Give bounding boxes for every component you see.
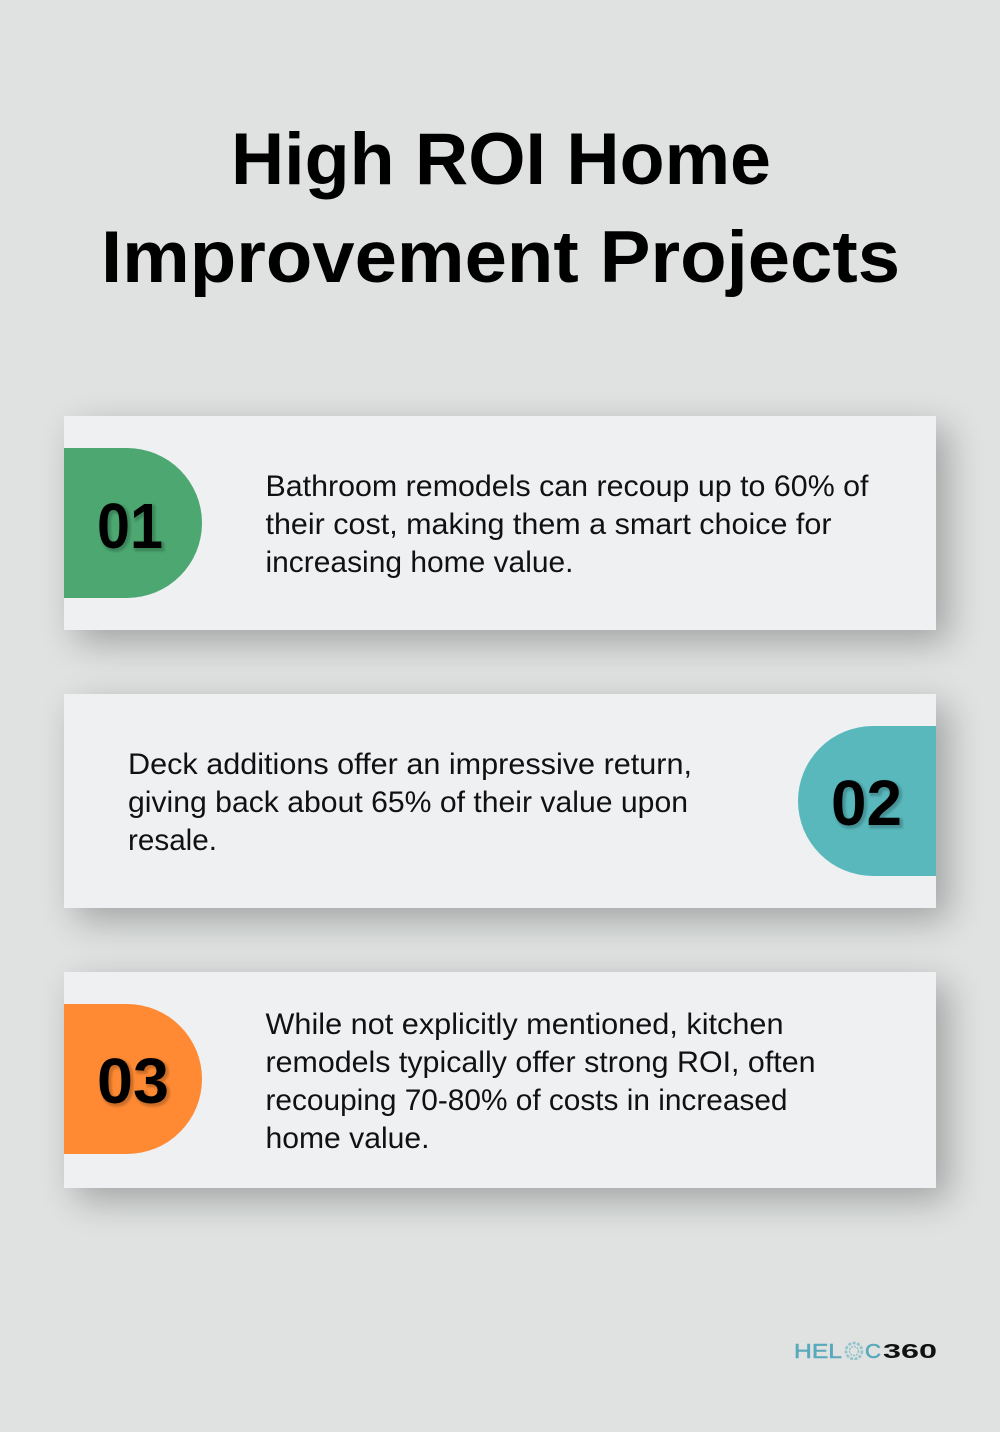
text: step 03 description: While not explicitly mentioned, kitchen	[266, 1008, 784, 1041]
logo: HELOC360: C	[865, 1341, 881, 1363]
panel: step 02	[64, 694, 948, 920]
text: step 02 description: resale.	[128, 824, 217, 857]
title	[101, 119, 900, 298]
text: step 01 description: Bathroom remodels can recoup up to 60% of	[266, 470, 869, 503]
badge: 03: 03	[97, 1045, 169, 1117]
text: step 03 description: recouping 70-80% of costs in increased	[266, 1084, 788, 1117]
text: step 01 description: increasing home value.	[266, 546, 574, 579]
text: step 02 description: giving back about 65% of their value upon	[128, 786, 688, 819]
panel: step 03	[64, 972, 948, 1200]
logo: HELOC360: HEL	[794, 1341, 842, 1363]
text: step 02 description	[128, 748, 692, 857]
text: step 03 description	[266, 1008, 816, 1155]
badge: 03	[64, 1004, 202, 1154]
text: step 03 description: remodels typically offer strong ROI, often	[266, 1046, 816, 1079]
logo: HELOC360: 360	[883, 1341, 937, 1363]
badge: 01: 01	[99, 492, 165, 564]
badge: 01: 01	[97, 490, 163, 562]
badge: 02	[798, 726, 936, 876]
badge: 02: 02	[833, 769, 904, 841]
badge: 01	[64, 448, 202, 598]
badge: 03: 03	[99, 1047, 171, 1119]
text: step 01 description	[266, 470, 869, 579]
text: step 03 description: home value.	[266, 1122, 430, 1155]
badge: 02: 02	[831, 767, 902, 839]
panel: step 01	[64, 416, 948, 642]
text: step 02 description: Deck additions offer an impressive return,	[128, 748, 692, 781]
title: High ROI Home	[231, 119, 771, 200]
logo: HELOC360	[794, 1341, 937, 1363]
text: step 01 description: their cost, making them a smart choice for	[266, 508, 832, 541]
title: Improvement Projects	[101, 217, 900, 298]
icon: swirl	[846, 1343, 862, 1359]
